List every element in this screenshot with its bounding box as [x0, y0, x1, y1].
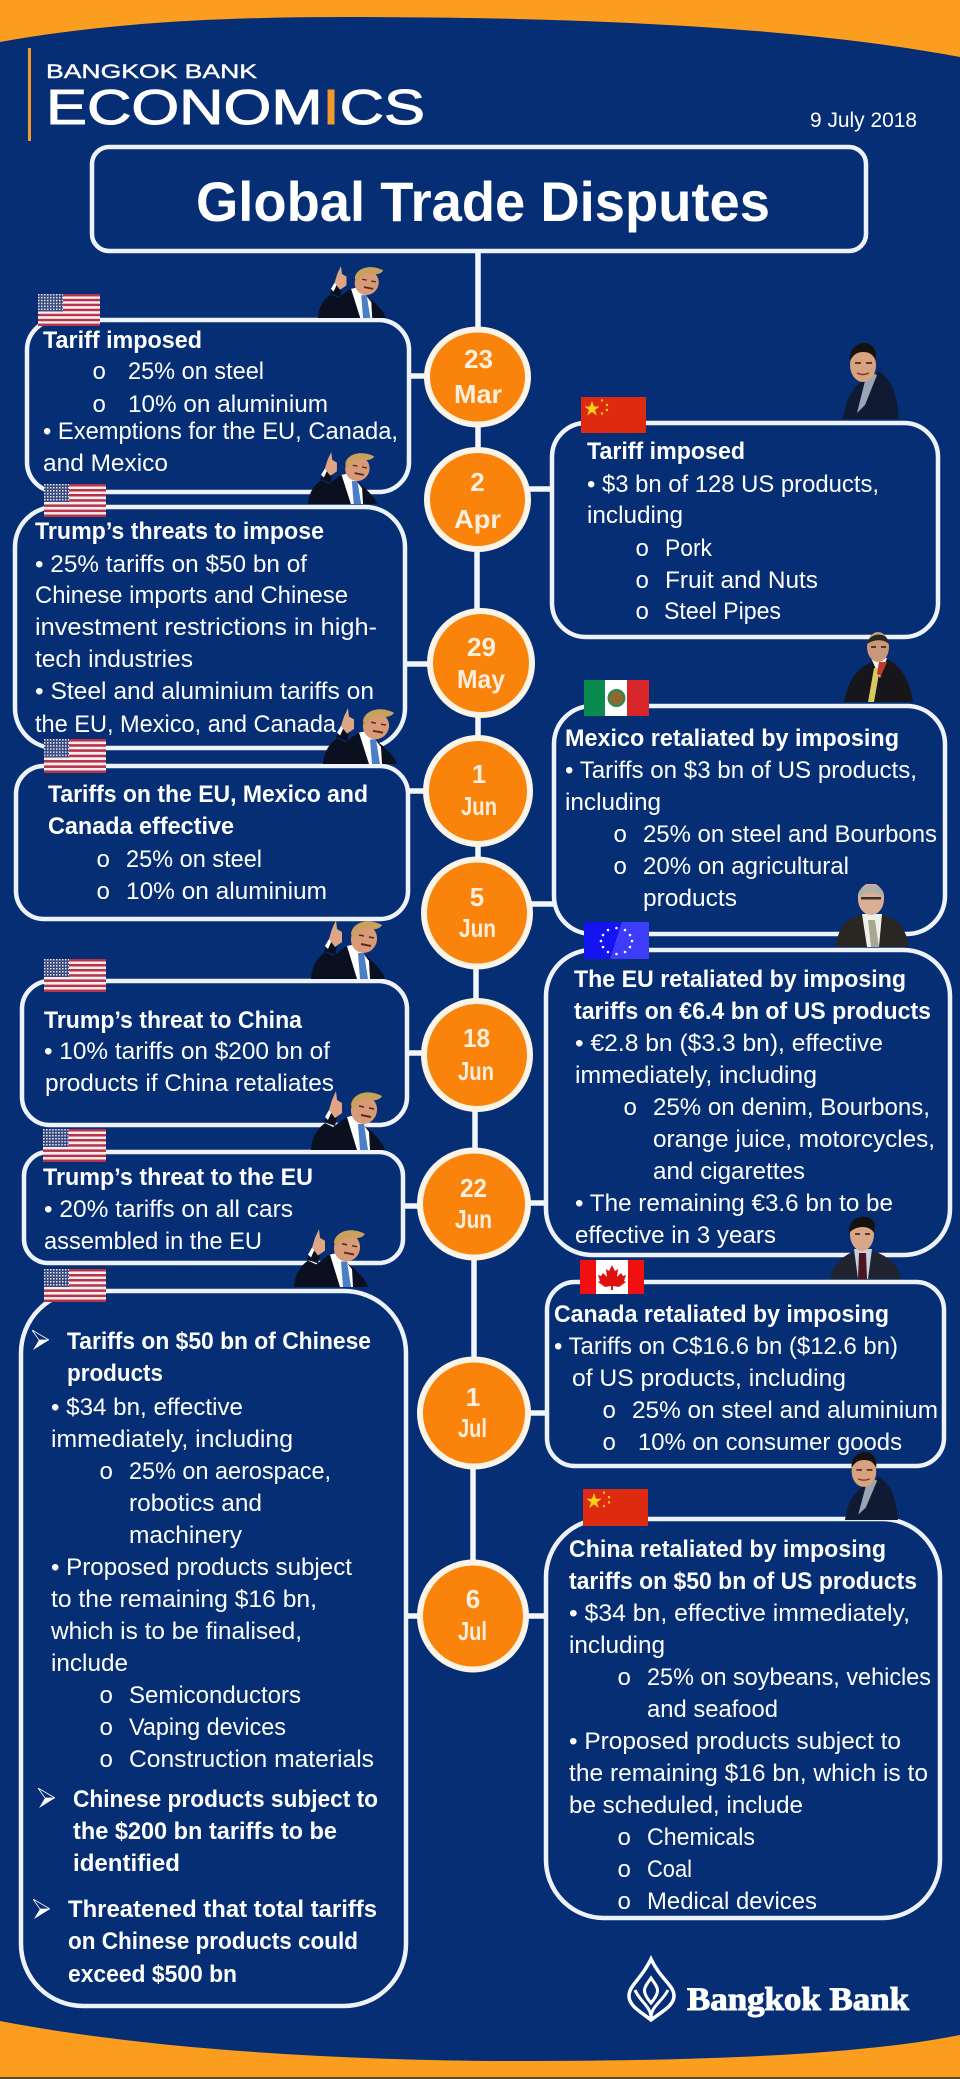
panel: US tariffs on Chinese products 6 Jul: robotics and [129, 1490, 262, 1517]
panel: US tariffs on Chinese products 6 Jul: Vaping devices [129, 1714, 286, 1741]
date circle: 1 Jun [426, 738, 530, 844]
panel: US tariffs on Chinese products 6 Jul: Semiconductors [129, 1682, 301, 1709]
date circle: 23 Mar [427, 330, 528, 424]
Bangkok Bank logo: Bangkok Bank [687, 1982, 910, 2018]
panel: Trump's threats to impose 29 May [15, 452, 405, 748]
panel: US tariffs on Chinese products 6 Jul [21, 1229, 406, 2006]
panel: US tariff imposed 23 Mar: Tariff imposed [43, 327, 202, 354]
panel: US tariffs on Chinese products 6 Jul: which is to be finalised, [50, 1618, 302, 1645]
panel: EU retaliated: and cigarettes [653, 1158, 805, 1185]
panel: China retaliated 6 Jul [546, 1452, 940, 1918]
panel: China retaliated 6 Jul: o [617, 1826, 631, 1853]
panel: US tariff imposed 23 Mar: o [92, 393, 106, 420]
panel: EU retaliated: effective in 3 years [575, 1222, 776, 1249]
panel: China retaliated 6 Jul: o [617, 1890, 631, 1917]
panel: Trump's threats to impose 29 May: • Steel and aluminium tariffs on [35, 678, 374, 705]
panel: China tariff imposed 2 Apr: including [587, 502, 683, 529]
title box [92, 147, 866, 251]
panel: China tariff imposed 2 Apr: Steel Pipes [664, 598, 781, 625]
panel: US tariffs on Chinese products 6 Jul: immediately, including [51, 1426, 293, 1453]
date circle: 2 Apr: 2 [470, 467, 485, 497]
date circle: 23 Mar: 23 [464, 344, 493, 374]
panel: China retaliated 6 Jul: Chemicals [647, 1824, 755, 1851]
panel: China retaliated 6 Jul: including [569, 1632, 665, 1659]
date circle: 23 Mar: Mar [454, 379, 502, 409]
panel: Mexico retaliated 5 Jun: including [565, 789, 661, 816]
panel: Tariffs on EU, Mexico and Canada effective 1 Jun: 10% on aluminium [126, 878, 327, 905]
panel: US tariffs on Chinese products 6 Jul: Chinese products subject to [73, 1786, 378, 1813]
timeline connectors [401, 250, 556, 1616]
panel: EU retaliated: tariffs on €6.4 bn of US products [574, 998, 931, 1025]
header logo: Bangkok Bank Economics [28, 48, 425, 141]
panel: Mexico retaliated 5 Jun: o [613, 823, 627, 850]
panel: US tariffs on Chinese products 6 Jul: • Proposed products subject [51, 1554, 352, 1581]
Bangkok Bank logo [629, 1959, 910, 2020]
panel: US tariffs on Chinese products 6 Jul: machinery [129, 1522, 242, 1549]
panel: Mexico retaliated 5 Jun [554, 632, 945, 934]
panel: Tariffs on EU, Mexico and Canada effective 1 Jun: o [96, 880, 110, 907]
panel: China tariff imposed 2 Apr: Tariff imposed [587, 438, 745, 465]
panel: Tariffs on EU, Mexico and Canada effective 1 Jun: Canada effective [48, 813, 234, 840]
panel: Mexico retaliated 5 Jun: Mexico retaliated by imposing [565, 725, 899, 752]
panel: China retaliated 6 Jul: o [617, 1858, 631, 1885]
panel: EU retaliated: 25% on denim, Bourbons, [653, 1094, 930, 1121]
date circle: 1 Jul [420, 1360, 528, 1466]
panel: EU retaliated [546, 883, 950, 1255]
panel: China retaliated 6 Jul: • Proposed products subject to [569, 1728, 901, 1755]
panel: Trump's threats to impose 29 May: investment restrictions in high- [35, 614, 377, 641]
date circle: 29 May: 29 [467, 632, 496, 662]
panel: China retaliated 6 Jul: China retaliated by imposing [569, 1536, 886, 1563]
panel: US tariffs on Chinese products 6 Jul: products [67, 1360, 163, 1387]
panel: EU retaliated: The EU retaliated by imposing [574, 966, 906, 993]
panel: Trump's threat to the EU 22 Jun: assembled in the EU [44, 1228, 262, 1255]
date circle: 1 Jul: Jul [458, 1413, 487, 1443]
panel: US tariffs on Chinese products 6 Jul: to the remaining $16 bn, [51, 1586, 317, 1613]
panel: China retaliated 6 Jul: 25% on soybeans, vehicles [647, 1664, 931, 1691]
panel: US tariff imposed 23 Mar: 25% on steel [128, 358, 264, 385]
date circle: 6 Jul: Jul [458, 1616, 487, 1646]
panel: US tariffs on Chinese products 6 Jul: o [99, 1716, 113, 1743]
date circle: 18 Jun [424, 1001, 530, 1109]
panel: EU retaliated: • The remaining €3.6 bn to be [575, 1190, 893, 1217]
panel: China retaliated 6 Jul: Coal [647, 1856, 692, 1883]
panel: Mexico retaliated 5 Jun: products [643, 885, 737, 912]
date circle: 5 Jun [424, 860, 530, 966]
panel: Tariffs on EU, Mexico and Canada effective 1 Jun: Tariffs on the EU, Mexico and [48, 781, 368, 808]
date circle: 22 Jun: 22 [460, 1173, 487, 1203]
panel: China tariff imposed 2 Apr: o [635, 537, 649, 564]
panel: US tariffs on Chinese products 6 Jul: o [99, 1684, 113, 1711]
panel: Canada retaliated 1 Jul: 25% on steel and aluminium [632, 1397, 938, 1424]
panel: US tariff imposed 23 Mar: • Exemptions for the EU, Canada, [43, 418, 398, 445]
panel: US tariffs on Chinese products 6 Jul: Threatened that total tariffs [68, 1896, 377, 1923]
panel: China retaliated 6 Jul: and seafood [647, 1696, 778, 1723]
panel: Trump's threat to the EU 22 Jun [24, 1091, 403, 1263]
panel: US tariff imposed 23 Mar: and Mexico [43, 450, 168, 477]
panel: Tariffs on EU, Mexico and Canada effective 1 Jun: 25% on steel [126, 846, 262, 873]
date circle: 2 Apr [427, 450, 528, 549]
panel: Mexico retaliated 5 Jun: 25% on steel and Bourbons [643, 821, 937, 848]
title box: Global Trade Disputes [196, 170, 770, 233]
panel: Canada retaliated 1 Jul: 10% on consumer goods [638, 1429, 902, 1456]
date circle: 2 Apr: Apr [454, 504, 501, 534]
panel: Trump's threat to China 18 Jun [22, 920, 407, 1125]
panel: Tariffs on EU, Mexico and Canada effective 1 Jun: o [96, 848, 110, 875]
header logo: Bangkok Bank Economics: ECONOM ICS [46, 81, 425, 135]
panel: Trump's threats to impose 29 May: • 25% tariffs on $50 bn of [35, 551, 307, 578]
panel: China tariff imposed 2 Apr: • $3 bn of 128 US products, [587, 471, 879, 498]
panel: US tariffs on Chinese products 6 Jul: o [99, 1748, 113, 1775]
header logo: Bangkok Bank Economics: BANGKOK BANK [46, 62, 257, 83]
panel: China tariff imposed 2 Apr: o [635, 569, 649, 596]
panel: EU retaliated: • €2.8 bn ($3.3 bn), effective [575, 1030, 883, 1057]
panel: Trump's threats to impose 29 May: Chinese imports and Chinese [35, 582, 348, 609]
panel: Trump's threats to impose 29 May: Trump’s threats to impose [35, 518, 324, 545]
date circle: 1 Jun: Jun [461, 791, 497, 821]
panel: China tariff imposed 2 Apr: o [635, 600, 649, 627]
panel: China tariff imposed 2 Apr [552, 343, 938, 637]
date: 9 July 2018 [810, 109, 917, 132]
date circle: 22 Jun: Jun [455, 1204, 492, 1234]
date circle: 1 Jun: 1 [472, 759, 486, 789]
panel: Canada retaliated 1 Jul: • Tariffs on C$16.6 bn ($12.6 bn) [554, 1333, 898, 1360]
panel: EU retaliated: immediately, including [575, 1062, 817, 1089]
panel: China retaliated 6 Jul: tariffs on $50 bn of US products [569, 1568, 917, 1595]
panel: US tariffs on Chinese products 6 Jul: on Chinese products could [68, 1928, 358, 1955]
panel: US tariffs on Chinese products 6 Jul: identified [73, 1850, 180, 1877]
date circle: 29 May [430, 611, 532, 715]
panel: China tariff imposed 2 Apr: Fruit and Nuts [665, 567, 818, 594]
panel: China retaliated 6 Jul: the remaining $16 bn, which is to [569, 1760, 928, 1787]
panel: China retaliated 6 Jul: Medical devices [647, 1888, 817, 1915]
panel: Mexico retaliated 5 Jun: • Tariffs on $3 bn of US products, [565, 757, 917, 784]
panel: Canada retaliated 1 Jul: of US products, including [572, 1365, 846, 1392]
date circle: 5 Jun: 5 [470, 882, 484, 912]
date circle: 29 May: May [457, 664, 506, 694]
date circle: 18 Jun: 18 [463, 1023, 490, 1053]
panel: US tariff imposed 23 Mar [27, 266, 409, 492]
panel: Trump's threat to the EU 22 Jun: Trump’s threat to the EU [43, 1164, 313, 1191]
panel: Trump's threat to the EU 22 Jun: • 20% tariffs on all cars [44, 1196, 293, 1223]
date circle: 18 Jun: Jun [458, 1056, 494, 1086]
panel: US tariff imposed 23 Mar: 10% on aluminium [128, 391, 328, 418]
date circle: 5 Jun: Jun [459, 913, 496, 943]
top orange wave [0, 0, 960, 57]
panel: US tariff imposed 23 Mar: o [92, 360, 106, 387]
panel: Trump's threat to China 18 Jun: products if China retaliates [45, 1070, 334, 1097]
panel: Mexico retaliated 5 Jun: 20% on agricultural [643, 853, 849, 880]
bottom orange wave [0, 2021, 960, 2079]
panel: China tariff imposed 2 Apr: Pork [665, 535, 713, 562]
panel: EU retaliated: orange juice, motorcycles, [653, 1126, 935, 1153]
panel: Canada retaliated 1 Jul [547, 1217, 944, 1466]
date circle: 6 Jul: 6 [466, 1584, 480, 1614]
panel: Trump's threats to impose 29 May: tech industries [35, 646, 193, 673]
panel: US tariffs on Chinese products 6 Jul: o [99, 1460, 113, 1487]
panel: US tariffs on Chinese products 6 Jul: exceed $500 bn [68, 1961, 237, 1988]
panel: Trump's threats to impose 29 May: the EU, Mexico, and Canada [35, 711, 337, 738]
panel: US tariffs on Chinese products 6 Jul: the $200 bn tariffs to be [73, 1818, 337, 1845]
panel: US tariffs on Chinese products 6 Jul: Construction materials [129, 1746, 374, 1773]
panel: Trump's threat to China 18 Jun: Trump’s threat to China [44, 1007, 303, 1034]
date circle: 6 Jul [420, 1562, 526, 1670]
panel: US tariffs on Chinese products 6 Jul: Tariffs on $50 bn of Chinese [67, 1328, 371, 1355]
panel: US tariffs on Chinese products 6 Jul: include [51, 1650, 128, 1677]
panel: Canada retaliated 1 Jul: Canada retaliated by imposing [554, 1301, 889, 1328]
panel: China retaliated 6 Jul: • $34 bn, effective immediately, [569, 1600, 910, 1627]
panel: China retaliated 6 Jul: o [617, 1666, 631, 1693]
panel: Canada retaliated 1 Jul: o [602, 1431, 616, 1458]
panel: EU retaliated: o [623, 1096, 637, 1123]
panel: US tariffs on Chinese products 6 Jul: 25% on aerospace, [129, 1458, 331, 1485]
panel: US tariffs on Chinese products 6 Jul: • $34 bn, effective [51, 1394, 243, 1421]
panel: China retaliated 6 Jul: be scheduled, include [569, 1792, 803, 1819]
date circle: 22 Jun [420, 1150, 528, 1258]
panel: Trump's threat to China 18 Jun: • 10% tariffs on $200 bn of [44, 1038, 330, 1065]
panel: Tariffs on EU, Mexico and Canada effective 1 Jun [16, 708, 408, 919]
panel: Canada retaliated 1 Jul: o [602, 1399, 616, 1426]
panel: Mexico retaliated 5 Jun: o [613, 855, 627, 882]
date circle: 1 Jul: 1 [466, 1382, 480, 1412]
